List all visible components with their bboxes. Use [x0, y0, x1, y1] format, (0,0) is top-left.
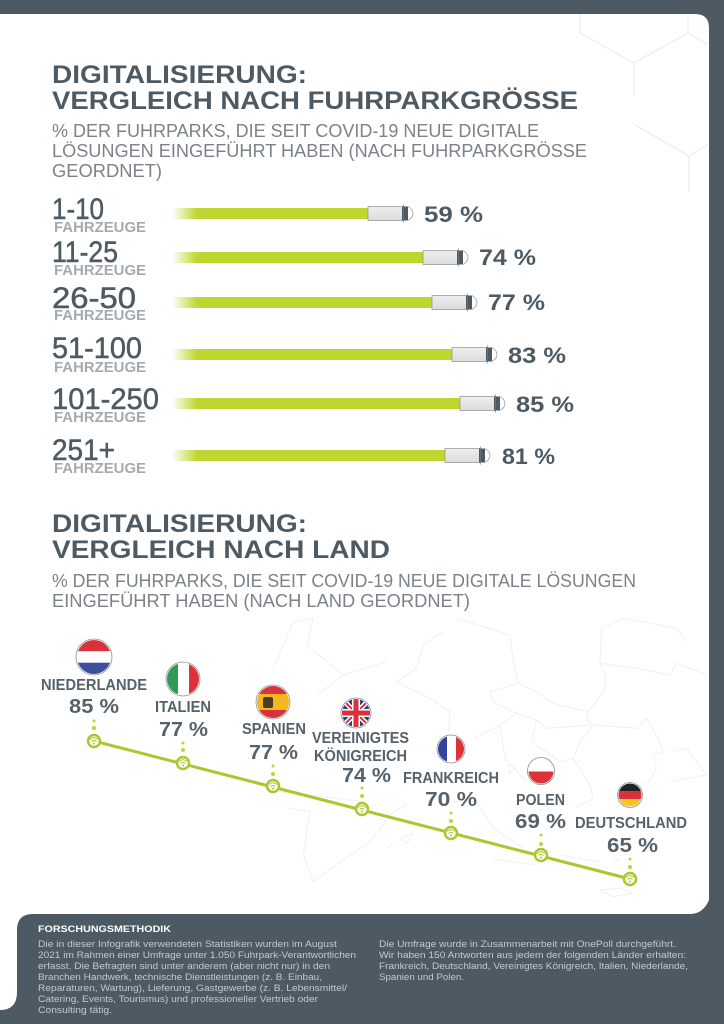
country: Vereinigtes Königreich: KÖNIGREICH — [314, 746, 407, 765]
row: 51-100 vehicles — [52, 332, 566, 376]
subheading: country: EINGEFÜHRT HABEN (NACH LAND GEORDNET) — [52, 590, 470, 611]
footer text: left column: Reparaturen, Wartung), Lieferung, Gastgewerbe (z. B. Lebensmittel/ — [38, 983, 348, 993]
country: Polen — [515, 758, 566, 861]
icon: UK flag — [341, 698, 371, 728]
icon: van — [432, 294, 477, 312]
icon: wifi node — [356, 803, 368, 815]
heading: country — [52, 510, 390, 564]
heading: fleet size: VERGLEICH NACH FUHRPARKGRÖSSE — [52, 86, 578, 115]
trend line — [94, 741, 630, 879]
icon: French flag — [437, 735, 465, 763]
country: Italien — [155, 662, 211, 769]
heading: country: VERGLEICH NACH LAND — [52, 536, 390, 564]
background hexagon pattern — [580, 14, 709, 192]
icon: van — [423, 248, 468, 266]
country: Italien: ITALIEN — [155, 699, 211, 716]
country: Polen: 69 % — [515, 810, 566, 833]
icon: Italian flag — [166, 662, 200, 696]
icon: wifi node — [445, 827, 457, 839]
icon: wifi node — [267, 780, 279, 792]
row: 51-100 vehicles: 83 % — [508, 343, 566, 368]
country: Deutschland: DEUTSCHLAND — [575, 815, 687, 832]
footer text: right column: Spanien und Polen. — [379, 972, 464, 982]
subheading: country — [52, 570, 636, 611]
footer text: right column: Wir haben 150 Antworten aus jedem der folgenden Länder erhalten: — [379, 950, 686, 960]
country: Italien: 77 % — [159, 718, 208, 741]
footer text: left column — [38, 939, 356, 1015]
row: 11-25 vehicles: FAHRZEUGE — [54, 263, 146, 279]
footer text: left column: Catering, Events, Tourismus) und professioneller Vertrieb oder — [38, 994, 318, 1004]
row: 11-25 vehicles: 11-25 — [52, 236, 118, 269]
footer text: left column: Consulting tätig. — [38, 1005, 112, 1015]
heading: country: DIGITALISIERUNG: — [52, 510, 307, 538]
country: Niederlande: NIEDERLANDE — [41, 677, 147, 694]
row: 101-250 vehicles: FAHRZEUGE — [54, 410, 146, 426]
icon: van — [460, 394, 505, 412]
footer text: right column: Frankreich, Deutschland, Vereinigtes Königreich, Italien, Niederlande, — [379, 961, 688, 971]
heading: fleet size — [52, 61, 578, 115]
row: 26-50 vehicles: 77 % — [488, 290, 545, 315]
icon: van — [368, 204, 413, 222]
icon: German flag — [618, 782, 642, 808]
country: Spanien — [242, 685, 306, 792]
country: Niederlande — [41, 639, 147, 747]
footer text: left column: Die in dieser Infografik verwendeten Statistiken wurden im August — [38, 939, 338, 949]
icon: van — [445, 446, 490, 464]
country: Frankreich: 70 % — [425, 788, 477, 811]
icon: wifi node — [624, 873, 636, 885]
country: Vereinigtes Königreich: VEREINIGTES — [312, 730, 409, 747]
footer text: left column: erfasst. Die Befragten sind unter anderem (aber nicht nur) in den — [38, 961, 330, 971]
row: 11-25 vehicles: 74 % — [479, 245, 536, 270]
country: Niederlande: 85 % — [69, 695, 119, 718]
country: Spanien: SPANIEN — [242, 721, 306, 738]
row: 1-10 vehicles: FAHRZEUGE — [54, 220, 146, 236]
footer text: left column: Branchen Handwerk, technische Dienstleistungen (z. B. Einbau, — [38, 972, 322, 982]
row: 1-10 vehicles: 59 % — [424, 202, 483, 227]
icon: van — [452, 346, 497, 364]
subheading: fleet size — [52, 120, 587, 181]
row: 101-250 vehicles — [52, 383, 574, 426]
background map of Europe — [273, 618, 707, 897]
footer text: left column: 2021 im Rahmen einer Umfrage unter 1.050 Fuhrpark-Verantwortlichen — [38, 950, 356, 960]
country: Vereinigtes Königreich — [312, 698, 409, 815]
footer title: FORSCHUNGSMETHODIK — [38, 924, 171, 935]
country: Frankreich: FRANKREICH — [403, 770, 499, 787]
subheading: fleet size: LÖSUNGEN EINGEFÜHRT HABEN (NACH FUHRPARKGRÖSSE — [52, 140, 587, 161]
row: 26-50 vehicles — [52, 282, 545, 324]
row: 51-100 vehicles: FAHRZEUGE — [54, 360, 146, 376]
subheading: fleet size: % DER FUHRPARKS, DIE SEIT COVID-19 NEUE DIGITALE — [52, 120, 539, 141]
row: 251+ vehicles: FAHRZEUGE — [54, 461, 146, 477]
subheading: fleet size: GEORDNET) — [52, 160, 162, 181]
row: 251+ vehicles — [52, 434, 555, 477]
row: 11-25 vehicles — [52, 236, 536, 279]
icon: Dutch flag — [76, 639, 112, 675]
country: Spanien: 77 % — [249, 741, 298, 764]
icon: wifi node — [88, 735, 100, 747]
country: Frankreich — [403, 735, 499, 839]
row: 251+ vehicles: 81 % — [502, 444, 555, 469]
row: 26-50 vehicles: 26-50 — [52, 282, 136, 315]
heading: fleet size: DIGITALISIERUNG: — [52, 61, 307, 89]
footer text: right column — [379, 939, 688, 982]
country: Deutschland: 65 % — [607, 834, 658, 857]
icon: Polish flag — [528, 758, 554, 784]
country: Polen: POLEN — [516, 792, 565, 809]
row: 26-50 vehicles: FAHRZEUGE — [54, 308, 146, 324]
row: 1-10 vehicles: 1-10 — [52, 193, 104, 226]
row: 1-10 vehicles — [52, 193, 483, 236]
row: 251+ vehicles: 251+ — [52, 434, 115, 467]
country: Vereinigtes Königreich: 74 % — [342, 764, 391, 787]
icon: wifi node — [535, 849, 547, 861]
icon: Spanish flag — [256, 685, 290, 719]
icon: wifi node — [177, 757, 189, 769]
subheading: country: % DER FUHRPARKS, DIE SEIT COVID-19 NEUE DIGITALE LÖSUNGEN — [52, 570, 636, 591]
row: 101-250 vehicles: 101-250 — [52, 383, 159, 416]
row: 101-250 vehicles: 85 % — [516, 392, 574, 417]
row: 51-100 vehicles: 51-100 — [52, 332, 142, 365]
country: Deutschland — [575, 782, 687, 885]
footer text: right column: Die Umfrage wurde in Zusammenarbeit mit OnePoll durchgeführt. — [379, 939, 676, 949]
